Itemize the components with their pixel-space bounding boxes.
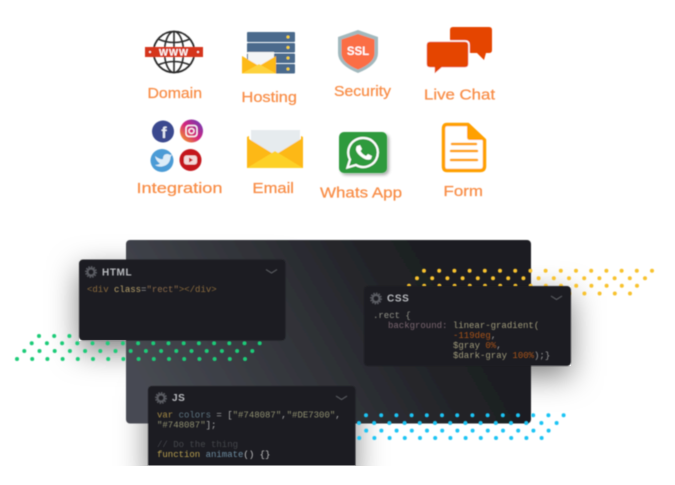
label: Form: Form	[444, 184, 483, 200]
code: JS snippet: function animate() {}	[157, 450, 270, 460]
heading: JS: JS	[172, 393, 185, 404]
dots: blue	[344, 415, 565, 438]
heading: CSS: CSS	[387, 294, 409, 304]
label: Security: Security	[334, 84, 392, 100]
label: Integration: Integration	[136, 181, 222, 197]
icon: gear	[86, 267, 96, 277]
icon: chevron	[551, 296, 562, 300]
icon: chevron	[336, 396, 347, 400]
icon: hosting server and envelope	[242, 32, 295, 74]
label: Hosting: Hosting	[242, 90, 297, 106]
icon: gear	[371, 293, 381, 304]
icon: chevron	[266, 270, 277, 273]
code: CSS snippet: .rect {	[373, 311, 411, 321]
code: JS snippet: "#748087"];	[157, 420, 216, 430]
icon: email envelope	[247, 130, 303, 168]
dots: yellow	[402, 271, 653, 294]
code: CSS snippet	[373, 311, 550, 361]
card: JS editor	[147, 386, 356, 466]
icon: live chat bubbles	[426, 27, 492, 75]
icon: social integrations: f	[161, 125, 167, 142]
icon: whatsapp	[339, 132, 389, 175]
code: CSS snippet: $dark-gray 100%);}	[453, 351, 550, 361]
code: JS snippet	[157, 410, 341, 460]
panel: dark background window	[126, 240, 531, 424]
icon: social integrations	[150, 120, 203, 172]
dots: green	[17, 336, 260, 359]
card: HTML editor	[79, 260, 286, 340]
label: Domain: Domain	[148, 86, 202, 102]
code: CSS snippet: -119deg,	[453, 331, 496, 341]
code editor illustration	[17, 240, 653, 476]
card: CSS editor	[364, 286, 571, 366]
code: CSS snippet: background: linear-gradient(	[388, 321, 539, 331]
code: JS snippet: // Do the thing	[157, 440, 238, 450]
icon: domain globe	[145, 31, 203, 73]
label: Email: Email	[252, 181, 294, 197]
icon: form document	[444, 124, 484, 170]
label: Whats App: Whats App	[320, 186, 402, 202]
icon: SSL shield	[338, 30, 378, 73]
label: Live Chat: Live Chat	[424, 88, 495, 104]
icon: domain globe: WWW	[159, 48, 189, 58]
icon: SSL shield: SSL	[347, 46, 369, 58]
heading: HTML: HTML	[102, 268, 132, 278]
code: JS snippet: var colors = ["#748087","#DE7300",	[157, 410, 341, 420]
code: HTML snippet: <div class="rect"></div>	[87, 285, 217, 295]
code: CSS snippet: $gray 0%,	[453, 341, 502, 351]
icon: gear	[156, 393, 166, 403]
